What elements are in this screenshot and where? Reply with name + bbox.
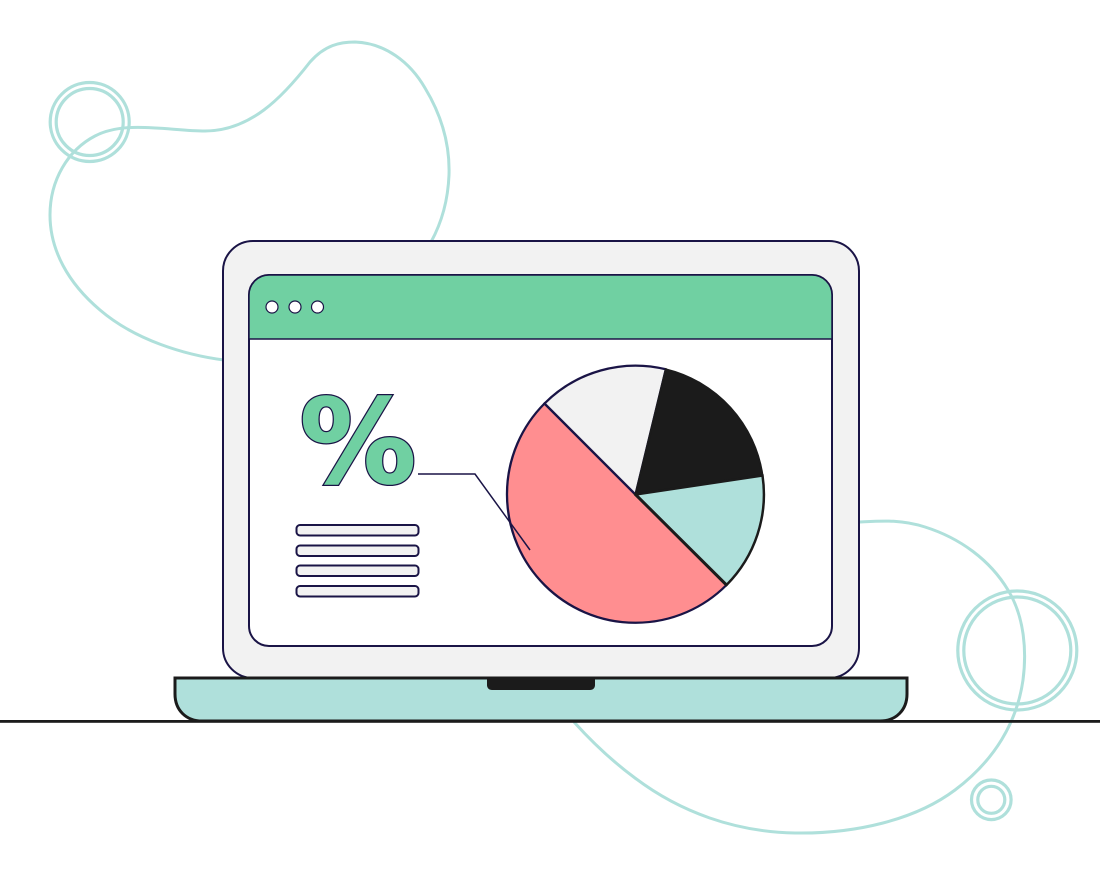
laptop base — [175, 678, 907, 721]
laptop — [175, 241, 907, 721]
slice: mint — [636, 476, 764, 585]
divider between red and mint — [636, 494, 726, 585]
ground line — [0, 720, 1100, 723]
window control dots — [266, 301, 324, 313]
window body — [249, 275, 832, 646]
pie chart — [507, 366, 764, 623]
slice: light grey — [544, 366, 666, 494]
decorative curve: bottom right — [574, 521, 1025, 833]
laptop lid — [223, 241, 859, 678]
callout leader line — [418, 474, 530, 550]
ring: top left — [50, 82, 129, 162]
window title bar — [249, 275, 832, 339]
percent sign: % — [300, 376, 416, 510]
decorative curve: top left — [50, 42, 449, 360]
ring: right large — [958, 591, 1077, 710]
laptop notch — [487, 679, 595, 690]
ring: bottom right small — [972, 780, 1011, 820]
slice: black — [636, 369, 762, 494]
browser window — [249, 275, 832, 646]
text placeholder lines — [296, 525, 418, 596]
slice: red half — [507, 404, 726, 623]
percent sign: % — [300, 376, 416, 510]
